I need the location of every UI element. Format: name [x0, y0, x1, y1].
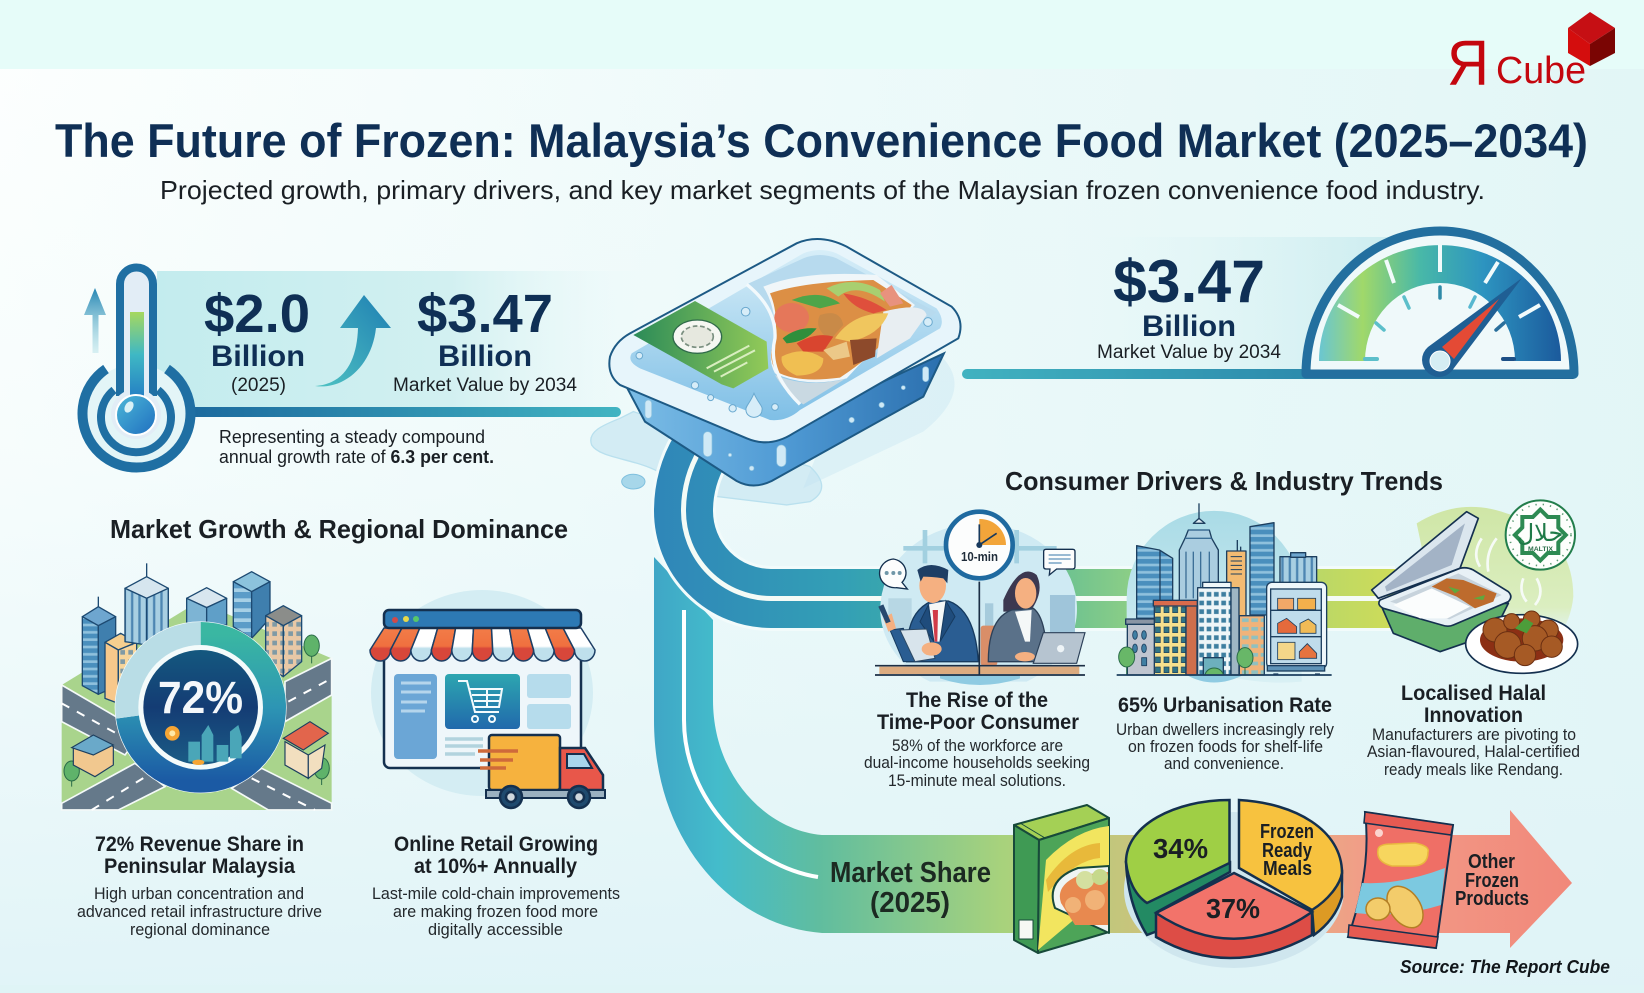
block: revenue share: High urban concentration and: [94, 884, 304, 903]
man: [907, 601, 978, 662]
bowl: [775, 375, 845, 404]
block: halal innovation: [1367, 682, 1580, 779]
slice: red 37%: [1156, 873, 1312, 939]
icon: urban skyline with freezer: [1117, 503, 1332, 683]
icon: food box: [1014, 805, 1109, 953]
icon: online store with delivery truck: [370, 590, 605, 808]
block: time-poor consumer: dual-income households seeking: [864, 753, 1090, 772]
food: [770, 280, 912, 380]
stat: 72%: 72%: [158, 672, 243, 723]
block: revenue share: [77, 833, 322, 939]
icon: snack bag: [1348, 812, 1453, 948]
slice side: yellow: [1312, 873, 1342, 935]
steam: [1476, 538, 1540, 605]
stat: 2034 value: $3.47: [417, 284, 553, 344]
chat bubbles: [880, 559, 907, 589]
pipe: consumer drivers band: [684, 450, 1395, 598]
label: other frozen products: Frozen: [1465, 870, 1519, 892]
awning: [370, 628, 595, 661]
pie labels: 34%: [1153, 833, 1208, 864]
stat: 2025 value: Billion: [211, 340, 305, 373]
woman: [1003, 572, 1040, 612]
lid: [1372, 512, 1478, 598]
stat: market value: $3.47: [1113, 248, 1265, 315]
laptop: [1033, 633, 1085, 663]
pipe: market share band: [654, 557, 1572, 948]
block: time-poor consumer: [864, 689, 1090, 790]
stat: 2025 value: (2025): [231, 375, 286, 396]
block: halal innovation: Asian-flavoured, Halal-certified: [1367, 742, 1580, 761]
block: halal innovation: Innovation: [1424, 704, 1523, 727]
block: online retail: [372, 833, 620, 939]
browser window: [384, 640, 581, 768]
stat: market value: Billion: [1142, 310, 1236, 343]
connector line: [190, 407, 621, 417]
heading: market share: Market Share: [830, 857, 991, 889]
block: urbanisation: on frozen foods for shelf-life: [1128, 737, 1323, 756]
heading: market share: (2025): [870, 887, 950, 919]
logo: RCube: [1447, 12, 1615, 99]
shadow: [803, 358, 955, 488]
truck: [486, 735, 605, 808]
clock label: 10-min: [961, 549, 998, 564]
chart: market share pie: 37%: [1206, 893, 1260, 924]
label: other frozen products: [1455, 851, 1529, 910]
block: online retail: Online Retail Growing: [394, 833, 598, 856]
block: time-poor consumer: 15-minute meal solutions.: [888, 771, 1066, 790]
block: halal innovation: Localised Halal: [1401, 682, 1546, 705]
block: revenue share: Peninsular Malaysia: [104, 855, 295, 878]
panel: gauge 3.47 billion: [962, 231, 1578, 379]
icon: cart: [458, 681, 502, 722]
subtitle: Projected growth, primary drivers, and key market segments of the Malaysian frozen convenience food industry.: [160, 175, 1485, 205]
stat: 2034 value: [393, 284, 577, 396]
icon: frozen meal tray: [609, 239, 961, 488]
block: revenue share: 72% Revenue Share in: [95, 833, 304, 856]
block: urbanisation: and convenience.: [1164, 754, 1284, 773]
slice side: red: [1156, 912, 1312, 958]
block: revenue share: advanced retail infrastructure drive: [77, 902, 322, 921]
label: [633, 301, 768, 388]
buildings: [82, 563, 302, 703]
block: revenue share: regional dominance: [130, 920, 270, 939]
block: online retail: at 10%+ Annually: [414, 855, 577, 878]
block: urbanisation: [1116, 694, 1334, 773]
text: CAGR: annual growth rate of 6.3 per cent.: [219, 447, 494, 467]
source: Source: The Report Cube: [1400, 957, 1610, 977]
icon: up arrow: [84, 288, 106, 353]
slice: yellow: [1239, 800, 1342, 910]
halal text: MALTIX: [1528, 547, 1553, 553]
block: time-poor consumer: Time-Poor Consumer: [877, 711, 1079, 734]
block: time-poor consumer: 58% of the workforce are: [892, 736, 1063, 755]
block: urbanisation: 65% Urbanisation Rate: [1118, 694, 1332, 717]
title: The Future of Frozen: Malaysia’s Convenience Food Market (2025–2034): [55, 114, 1588, 167]
block: online retail: digitally accessible: [428, 920, 563, 939]
chart: market share pie: [1124, 800, 1344, 968]
stat: 2025 value: [204, 284, 310, 396]
bowl on box: [1053, 866, 1109, 933]
halal badge: [1506, 500, 1575, 570]
block: time-poor consumer: The Rise of the: [906, 689, 1048, 712]
icon: time-poor workers: [875, 512, 1085, 685]
trees and houses: [64, 635, 329, 787]
heading: consumer drivers: Consumer Drivers & Industry Trends: [1005, 466, 1443, 496]
skyline inside ring: [188, 725, 242, 762]
icon: halal ready meal: [1372, 500, 1578, 673]
chart: market share pie: Frozen: [1260, 821, 1314, 843]
logo: RCube: Я: [1447, 27, 1489, 99]
block: online retail: are making frozen food more: [393, 902, 598, 921]
freezer: [1267, 582, 1327, 674]
compartment divider: [747, 284, 800, 404]
block: halal innovation: Manufacturers are pivoting to: [1372, 725, 1576, 744]
lid: [609, 239, 961, 442]
icon: city map with 72% ring: [62, 563, 332, 810]
droplets: [636, 307, 932, 417]
chair: [981, 626, 997, 666]
halal text: حلال: [1517, 519, 1563, 547]
chart: flow pipes: [654, 450, 1572, 948]
panel: market value 2025 to 2034: [83, 268, 647, 468]
arrow: growth: [315, 295, 391, 386]
label: other frozen products: Products: [1455, 888, 1529, 910]
stat: 2034 value: Market Value by 2034: [393, 375, 577, 396]
base: [627, 353, 944, 485]
desk: [879, 667, 1079, 674]
film window: [630, 250, 942, 420]
logo: RCube: Cube: [1496, 50, 1586, 92]
icon: speedometer: [1306, 231, 1574, 377]
roads: [62, 658, 332, 810]
heading: market share: [830, 857, 991, 919]
slice side: green: [1126, 862, 1230, 935]
stat: 2025 value: $2.0: [204, 284, 310, 344]
stat: market value: Market Value by 2034: [1097, 342, 1281, 363]
stat: market value: [1097, 248, 1281, 363]
label: other frozen products: Other: [1468, 851, 1515, 873]
trees: [1119, 647, 1253, 675]
browser bar: [384, 610, 581, 628]
icon: thermometer: [83, 268, 191, 468]
stat: 2034 value: Billion: [438, 340, 532, 373]
ring: [115, 621, 287, 793]
block: online retail: Last-mile cold-chain improvements: [372, 884, 620, 903]
slice: green 34%: [1126, 800, 1230, 903]
block: urbanisation: Urban dwellers increasingly rely: [1116, 720, 1334, 739]
tray: [1382, 603, 1508, 652]
chart: market share pie: Ready: [1262, 840, 1313, 862]
text: CAGR: [219, 427, 494, 467]
heading: market growth: Market Growth & Regional Dominance: [110, 514, 568, 544]
text: CAGR: Representing a steady compound: [219, 427, 485, 447]
meltwater puddle: [591, 412, 822, 505]
plate: [1466, 615, 1578, 673]
clock: [946, 512, 1013, 578]
icon: needle: [1422, 278, 1522, 377]
block: halal innovation: ready meals like Rendang.: [1384, 760, 1563, 779]
chart: market share pie: Meals: [1263, 858, 1312, 880]
